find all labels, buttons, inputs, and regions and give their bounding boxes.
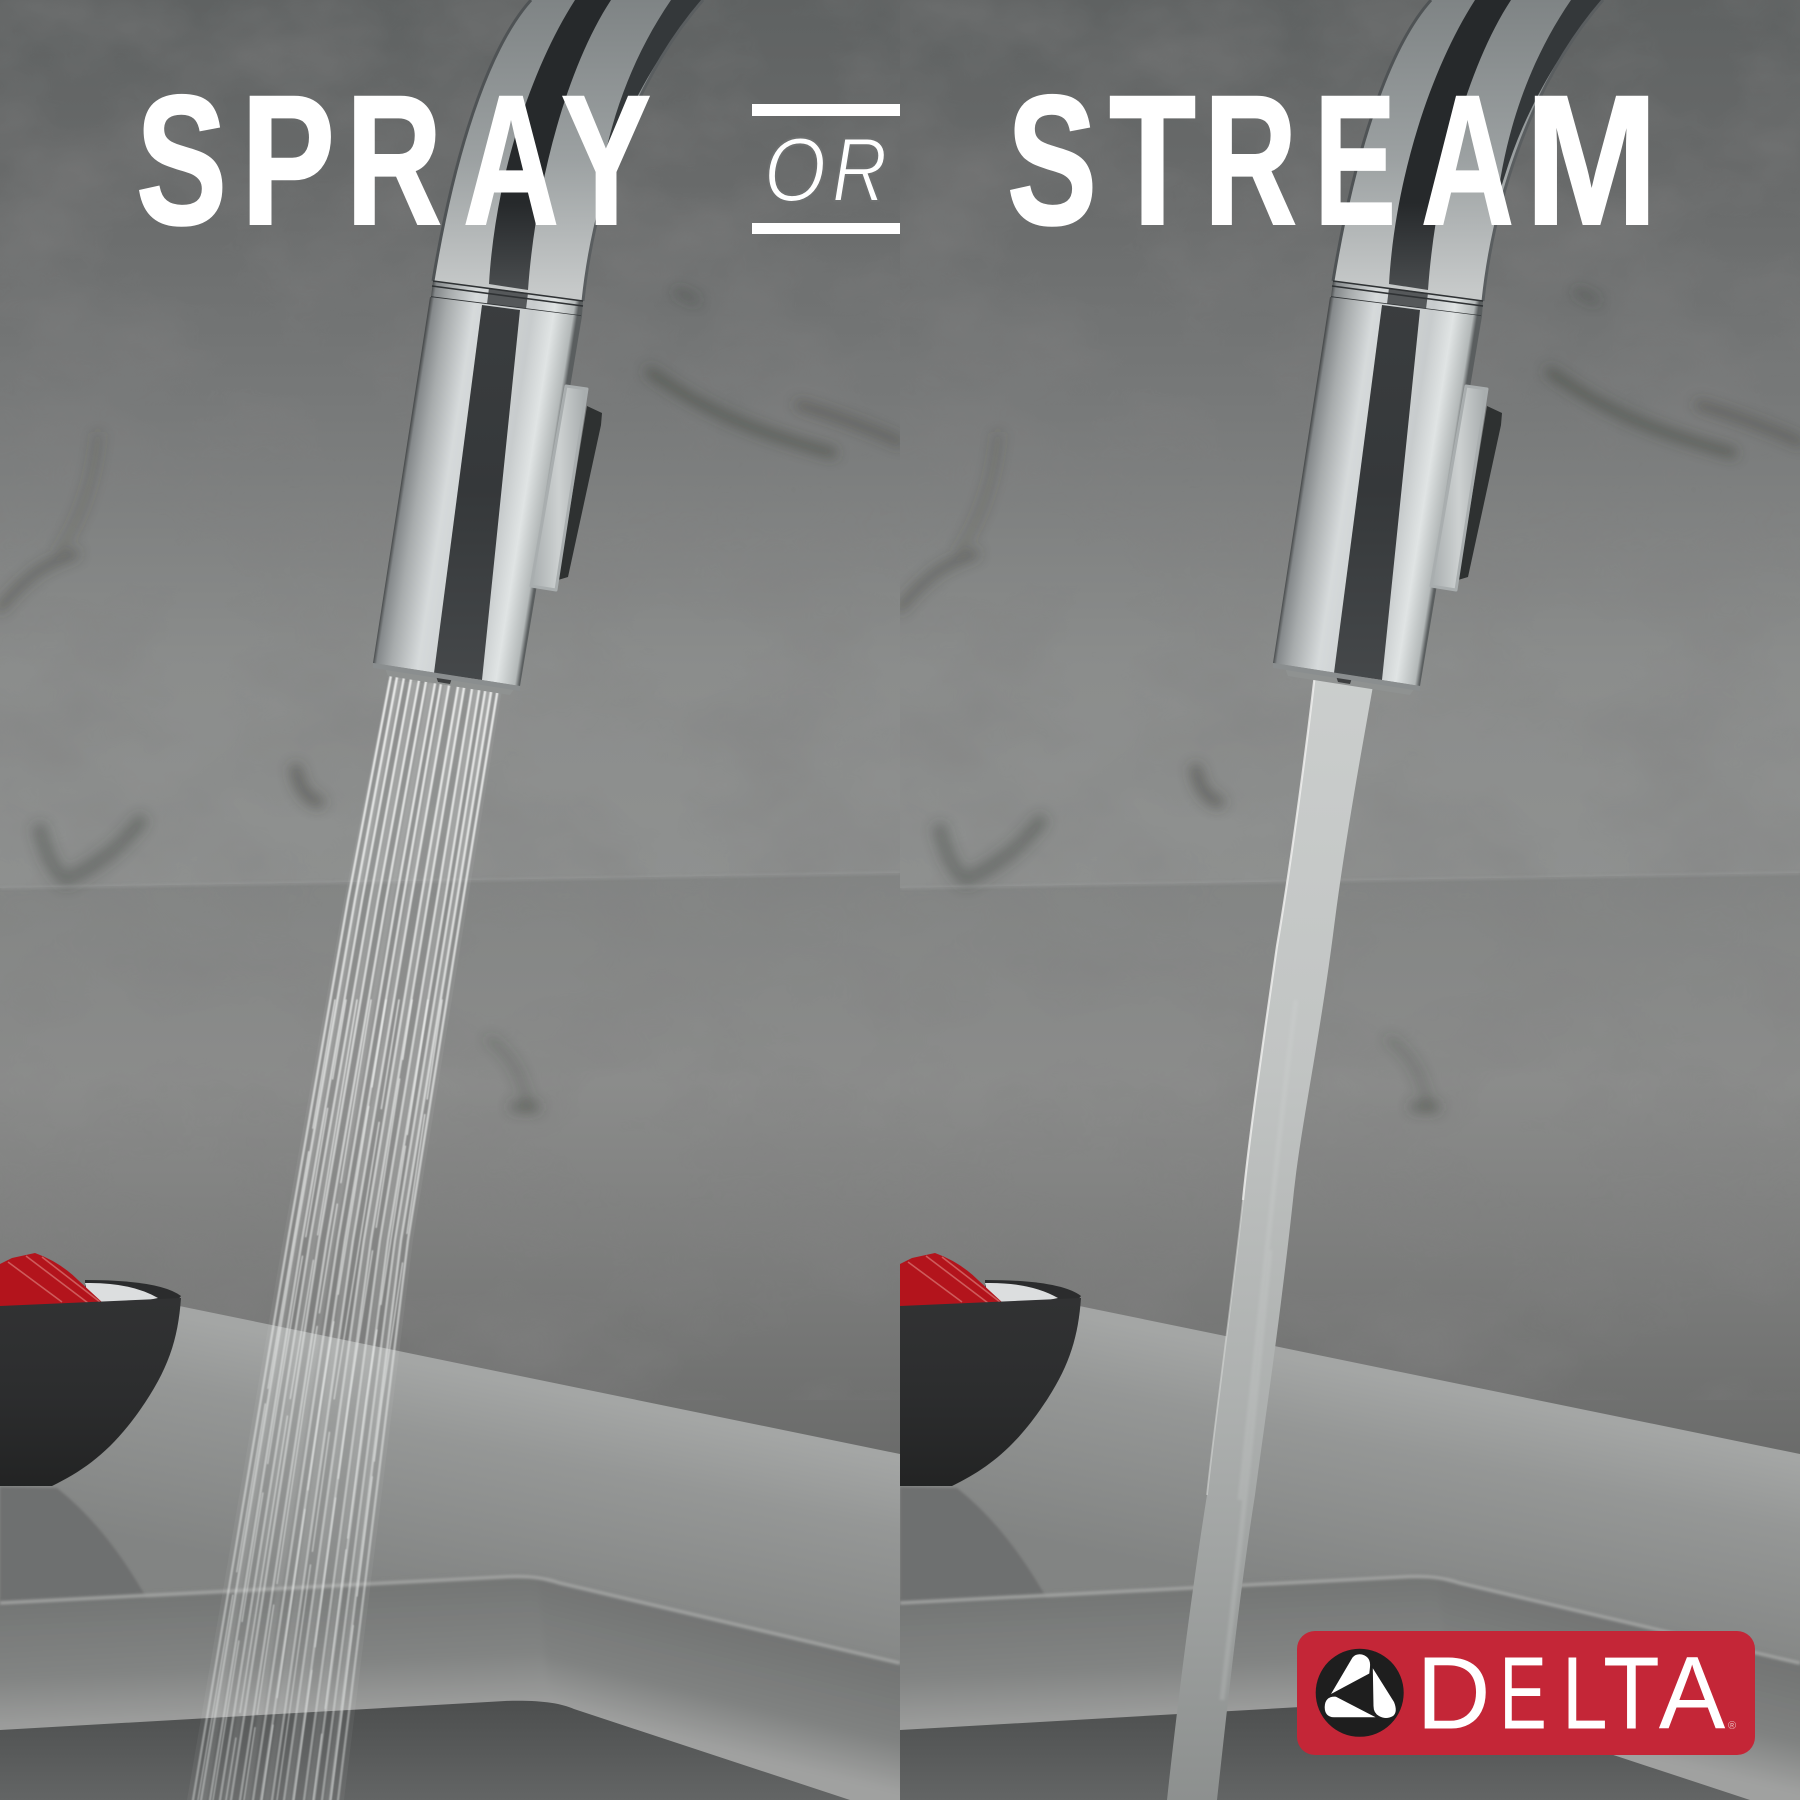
spray head ring [431, 281, 583, 316]
wordmark: T [1603, 1635, 1660, 1750]
heading: STREAM: S [1007, 58, 1097, 264]
panel: stream (right) [870, 0, 1800, 1800]
heading: SPRAY: Y [561, 58, 651, 264]
wordmark: A [1659, 1635, 1726, 1750]
background scene: marble wall, counter and sink [0, 0, 930, 1800]
counter top [0, 1300, 900, 1700]
nozzle lip [373, 663, 520, 695]
heading: OR with rules: R [832, 120, 887, 221]
heading: SPRAY: R [346, 58, 442, 264]
heading: OR with rules [752, 104, 900, 234]
faucet spray head repeat [1273, 0, 1603, 695]
sink rim [0, 1576, 930, 1800]
spray water strands [187, 670, 502, 1800]
dark rocker behind button [558, 406, 602, 580]
heading: SPRAY: P [241, 58, 335, 264]
heading: SPRAY: S [136, 58, 227, 264]
wordmark: D [1416, 1635, 1491, 1750]
heading: STREAM: E [1314, 58, 1396, 264]
heading: SPRAY: A [463, 58, 559, 264]
heading: OR with rules: O [764, 120, 826, 221]
panel: spray (left) [0, 0, 930, 1800]
logo: Delta [1297, 1631, 1755, 1755]
heading: STREAM: A [1421, 58, 1514, 264]
solid water stream [1167, 674, 1373, 1800]
bowl with red object [0, 1253, 181, 1486]
wordmark: L [1562, 1635, 1608, 1750]
curved chrome tube [433, 0, 703, 301]
spray head body [373, 297, 582, 686]
icon: delta triangle mark [1316, 1649, 1404, 1737]
wordmark: E [1499, 1635, 1547, 1750]
heading: STREAM: R [1204, 58, 1297, 264]
faucet spray head [373, 0, 703, 695]
marble wall [0, 0, 900, 888]
heading: STREAM: T [1109, 58, 1196, 264]
background scene repeat [870, 0, 1800, 1800]
registered mark: ® [1728, 1720, 1736, 1732]
sink basin [0, 1701, 850, 1800]
heading: STREAM: M [1525, 58, 1658, 264]
spray toggle button [531, 386, 587, 590]
bowl reflection [0, 1487, 152, 1616]
